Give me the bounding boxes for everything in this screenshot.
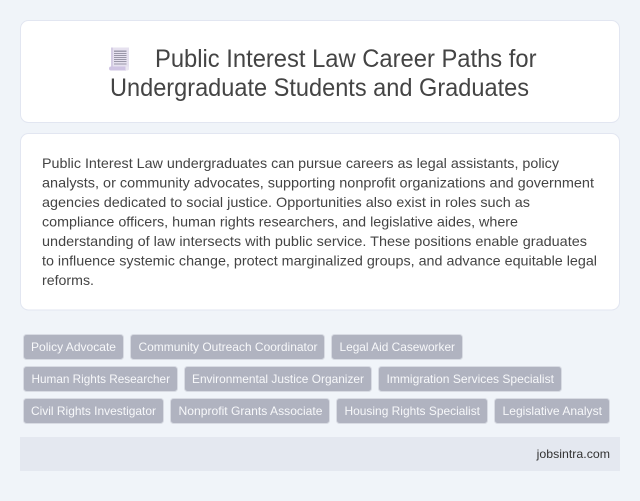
tag: Human Rights Researcher <box>24 366 178 392</box>
description text: Public Interest Law undergraduates can pursue careers as legal assistants, policy <box>42 155 559 171</box>
tag: Policy Advocate: Policy Advocate <box>31 340 116 354</box>
tag: Housing Rights Specialist <box>336 398 488 424</box>
description text: compliance officers, human rights researchers, and legislative aides, where <box>42 214 518 230</box>
tag: Civil Rights Investigator: Civil Rights Investigator <box>31 404 156 418</box>
description text: analysts, or community advocates, supporting nonprofit organizations and government <box>42 174 594 190</box>
tag: Community Outreach Coordinator <box>130 334 324 360</box>
tag: Legal Aid Caseworker: Legal Aid Caseworker <box>340 340 455 354</box>
tag: Community Outreach Coordinator: Community Outreach Coordinator <box>138 340 318 354</box>
tag: Environmental Justice Organizer: Environmental Justice Organizer <box>192 372 364 386</box>
description text: to influence systemic change, protect marginalized groups, and advance equitable legal <box>42 252 597 268</box>
icon: legal document scroll <box>109 48 129 70</box>
panel: description <box>20 134 620 310</box>
description text: understanding of law intersects with public service. These positions enable graduates <box>42 233 587 249</box>
title text <box>110 45 536 102</box>
career tags <box>24 334 610 424</box>
tag: Civil Rights Investigator <box>24 398 164 424</box>
description text: reforms. <box>42 272 94 288</box>
title text: Undergraduate Students and Graduates <box>110 74 529 102</box>
tag: Environmental Justice Organizer <box>184 366 372 392</box>
description text: agencies dedicated to social justice. Opportunities also exist in roles such as <box>42 194 530 210</box>
tag: Policy Advocate <box>24 334 124 360</box>
tag: Immigration Services Specialist <box>378 366 562 392</box>
title text: Public Interest Law Career Paths for <box>155 45 536 73</box>
tag: Housing Rights Specialist: Housing Rights Specialist <box>344 404 481 418</box>
tag: Legal Aid Caseworker <box>332 334 462 360</box>
tag: Human Rights Researcher: Human Rights Researcher <box>32 372 170 386</box>
tag: Legislative Analyst: Legislative Analyst <box>502 404 603 418</box>
footer bar <box>20 437 620 471</box>
tag: Legislative Analyst <box>494 398 610 424</box>
footer source text: jobsintra.com <box>536 447 610 461</box>
tag: Nonprofit Grants Associate: Nonprofit Grants Associate <box>178 404 323 418</box>
panel: title <box>20 20 620 122</box>
description text <box>42 155 597 288</box>
tag: Nonprofit Grants Associate <box>170 398 330 424</box>
tag: Immigration Services Specialist: Immigration Services Specialist <box>386 372 555 386</box>
